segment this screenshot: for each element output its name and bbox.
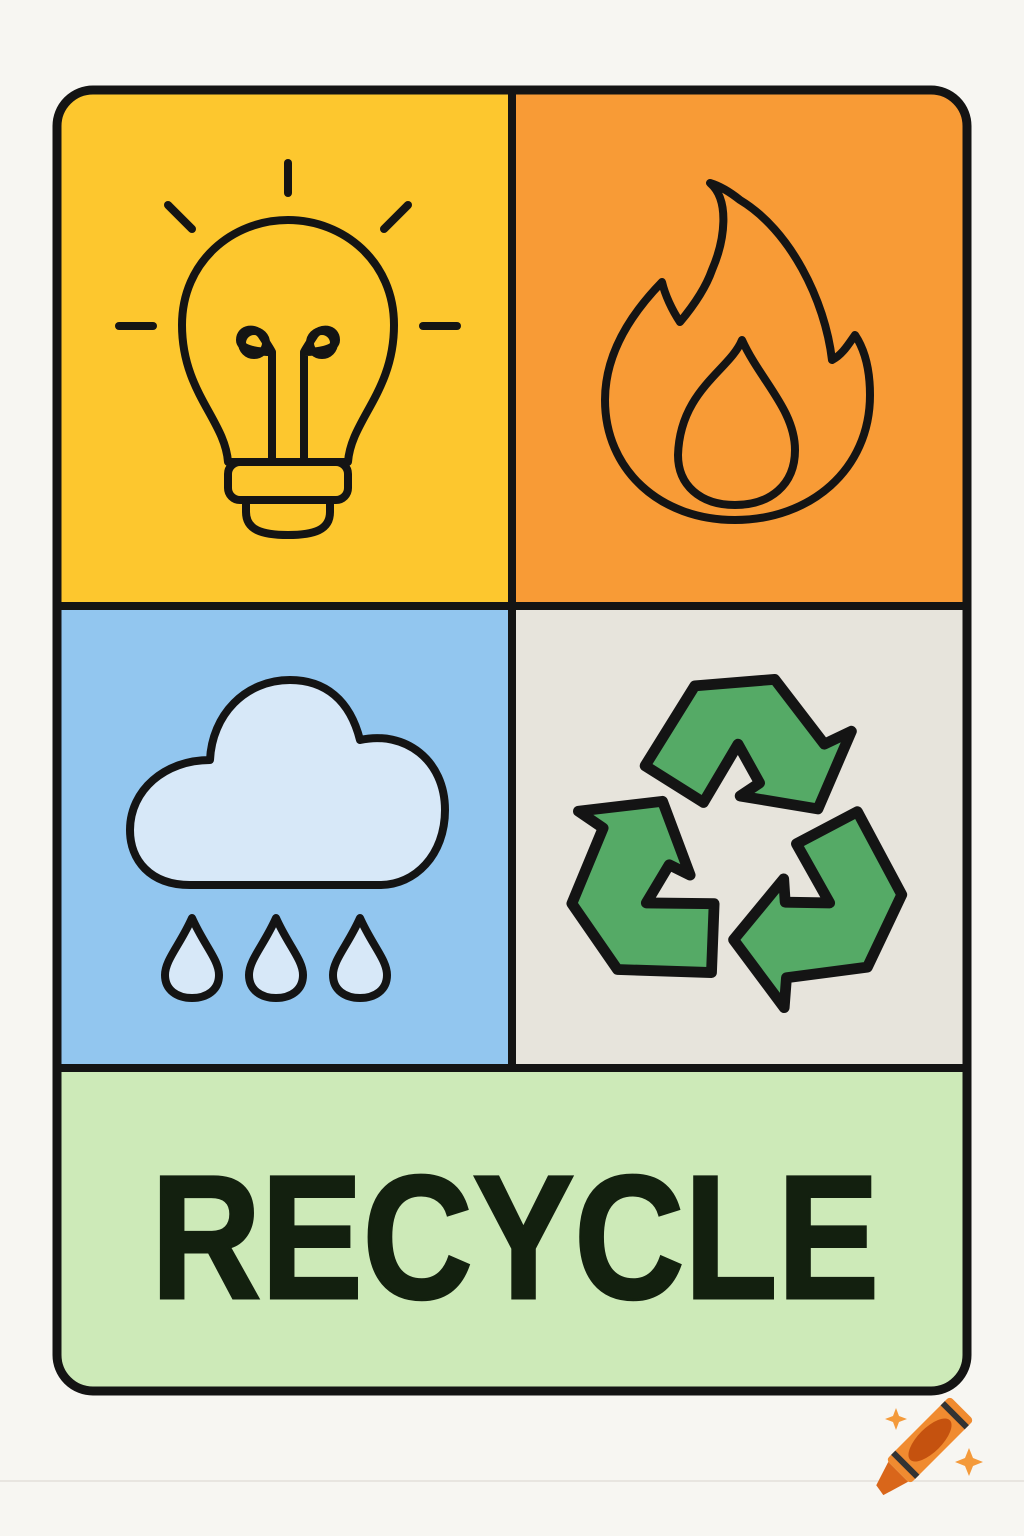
panel: yellow lightbulb (58, 91, 512, 606)
icon: crayon logo (867, 1396, 983, 1503)
icon: flame (605, 183, 870, 520)
card border (57, 90, 967, 1391)
panel: green label (58, 1068, 966, 1390)
panel: blue rain cloud (58, 606, 512, 1068)
icon: cloud (130, 680, 445, 885)
text: RECYCLE: RECYCLE (151, 1140, 879, 1336)
icon: recycle symbol (566, 674, 908, 1013)
panel: gray recycle (512, 606, 966, 1068)
panel: orange flame (512, 91, 966, 606)
icon: raindrops (165, 918, 387, 998)
grid lines (58, 90, 966, 1068)
icon: lightbulb (119, 163, 457, 535)
